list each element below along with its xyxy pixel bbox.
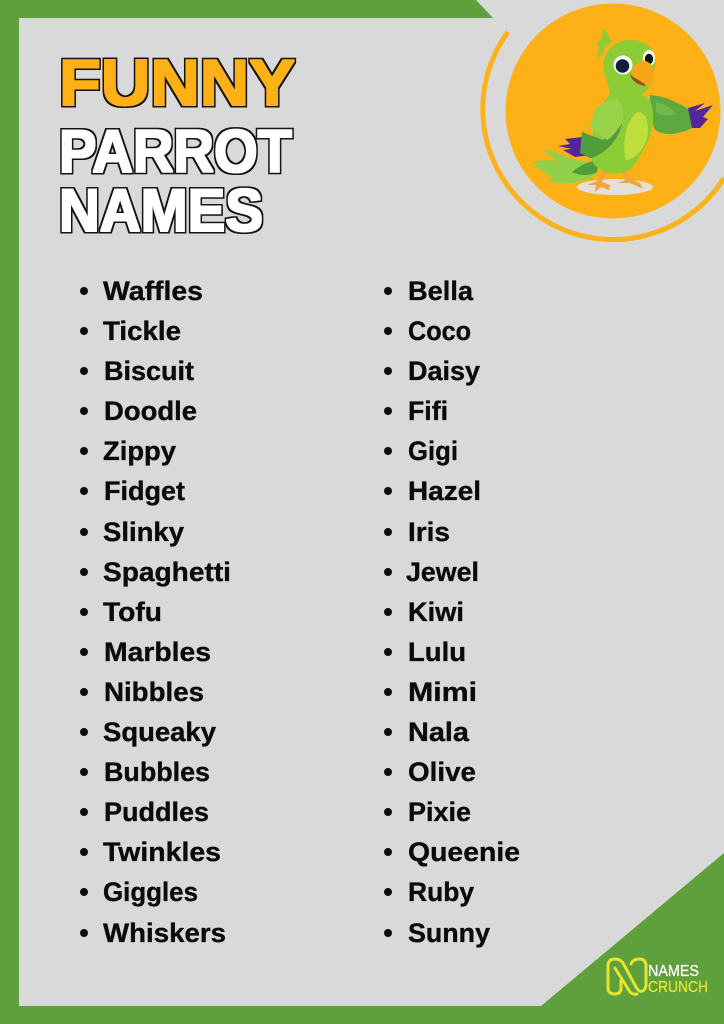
names: Lulu (408, 637, 466, 667)
names: Jewel (406, 557, 479, 587)
bullets (384, 287, 392, 937)
beak (631, 61, 654, 87)
names: Gigi (408, 436, 458, 466)
title (59, 46, 295, 244)
names: Twinkles (103, 837, 221, 867)
names: Kiwi (408, 597, 464, 627)
left wing dark (580, 123, 622, 158)
names: Fidget (104, 476, 185, 506)
names: Nibbles (104, 677, 204, 707)
names: Iris (408, 517, 450, 547)
title word: parrot: PARROT (59, 118, 292, 185)
names: Fifi (408, 396, 448, 426)
title word: funny: FUNNY (59, 46, 295, 119)
names: Squeaky (103, 717, 216, 747)
names: Whiskers (103, 918, 226, 948)
legs and feet (587, 171, 643, 192)
body (591, 92, 653, 174)
names: Olive (408, 757, 476, 787)
crest (597, 28, 612, 58)
right wing (650, 95, 693, 134)
names: Giggles (103, 877, 198, 907)
green corner triangle (541, 853, 724, 1024)
names: Nala (408, 717, 469, 747)
ground ellipse (577, 179, 653, 195)
names: Ruby (408, 877, 474, 907)
mouth (630, 74, 646, 86)
name list: left column (80, 276, 231, 948)
head and neck (603, 40, 655, 98)
names: Bella (408, 276, 473, 306)
title word: names: NAMES (59, 177, 263, 244)
tail (533, 150, 598, 183)
orange ring arc (483, 32, 724, 240)
name list: right column (384, 276, 520, 948)
names: Slinky (103, 517, 184, 547)
names: Queenie (408, 837, 520, 867)
right wing light feathers (656, 102, 676, 115)
tail shadow (572, 160, 598, 175)
names: Daisy (408, 356, 480, 386)
logo: names crunch (608, 959, 708, 996)
names: Spaghetti (103, 557, 231, 587)
names: Doodle (104, 396, 197, 426)
left eye (614, 56, 632, 74)
names: Biscuit (104, 356, 194, 386)
names: Tofu (103, 597, 162, 627)
names (406, 276, 520, 948)
logo text: crunch: CRUNCH (648, 979, 708, 996)
names: Sunny (408, 918, 490, 948)
orange circle (506, 4, 720, 218)
names: Zippy (103, 436, 176, 466)
right wing purple feathers (688, 103, 713, 128)
names: Tickle (103, 316, 181, 346)
names: Pixie (408, 797, 471, 827)
logo mark (608, 959, 646, 994)
left wing light (590, 98, 623, 140)
names: Coco (408, 316, 471, 346)
logo text: names: NAMES (648, 963, 699, 980)
right eye (643, 50, 655, 66)
belly highlight (624, 112, 648, 160)
icon: parrot (533, 28, 713, 195)
bullets (80, 287, 88, 937)
names (103, 276, 231, 948)
left wing purple feathers (558, 137, 592, 157)
names: Puddles (104, 797, 209, 827)
names: Waffles (103, 276, 203, 306)
names: Hazel (408, 476, 481, 506)
names: Bubbles (104, 757, 210, 787)
names: Marbles (104, 637, 211, 667)
names: Mimi (408, 677, 477, 707)
